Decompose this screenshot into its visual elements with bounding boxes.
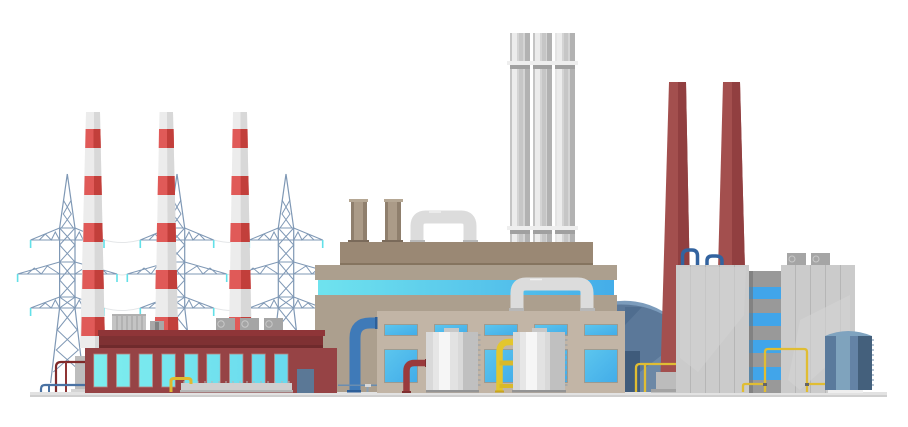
- silver tank 2: [512, 328, 568, 392]
- factory door: [297, 369, 314, 393]
- ground strip: [30, 392, 887, 397]
- red pipe: [402, 359, 427, 393]
- yellow pipes by dome: [636, 364, 676, 392]
- blue storage tank: [825, 331, 874, 393]
- striped chimney 2: [155, 112, 178, 331]
- main building lower body: [315, 295, 617, 392]
- yellow pipes front: [743, 349, 825, 392]
- main building cornice: [315, 265, 617, 280]
- white pipe on lower building: [509, 280, 595, 311]
- front building windows: [384, 324, 618, 382]
- striped chimney 3: [229, 112, 252, 331]
- blue pipes over grey building: [682, 250, 722, 266]
- main building glass band: [318, 280, 614, 295]
- silver stack group: [507, 33, 578, 243]
- low platform: [180, 381, 293, 392]
- grey base block: [651, 372, 676, 392]
- red factory hall: [85, 330, 337, 393]
- fan units on right building: [787, 253, 830, 265]
- transmission tower 3: [236, 174, 336, 383]
- power lines: [104, 240, 250, 310]
- roof fan units: [216, 318, 283, 330]
- grey building left: [676, 265, 749, 393]
- brown vent pipe 1: [348, 199, 369, 242]
- main building upper block: [340, 242, 593, 265]
- front tan building: [377, 311, 625, 393]
- brown vent pipe 2: [382, 199, 403, 242]
- silver tank 1: [426, 328, 480, 392]
- yellow pipe on hall: [171, 378, 191, 392]
- grey building right: [781, 265, 855, 393]
- left utility pipes: [41, 356, 85, 392]
- grey striped core: [749, 271, 781, 393]
- tall red stack 1: [660, 82, 692, 392]
- factory windows: [94, 354, 288, 387]
- blue pipe: [338, 317, 378, 392]
- striped chimney 1: [80, 112, 105, 348]
- white roof pipe: [410, 212, 478, 242]
- yellow pipe by tank: [495, 342, 513, 392]
- tall red stack 2: [718, 82, 745, 270]
- transmission tower 2: [127, 174, 227, 383]
- roof vent box: [112, 314, 146, 330]
- dome tank behind: [610, 301, 664, 392]
- transmission tower 1: [18, 174, 117, 383]
- small roof box: [150, 321, 164, 330]
